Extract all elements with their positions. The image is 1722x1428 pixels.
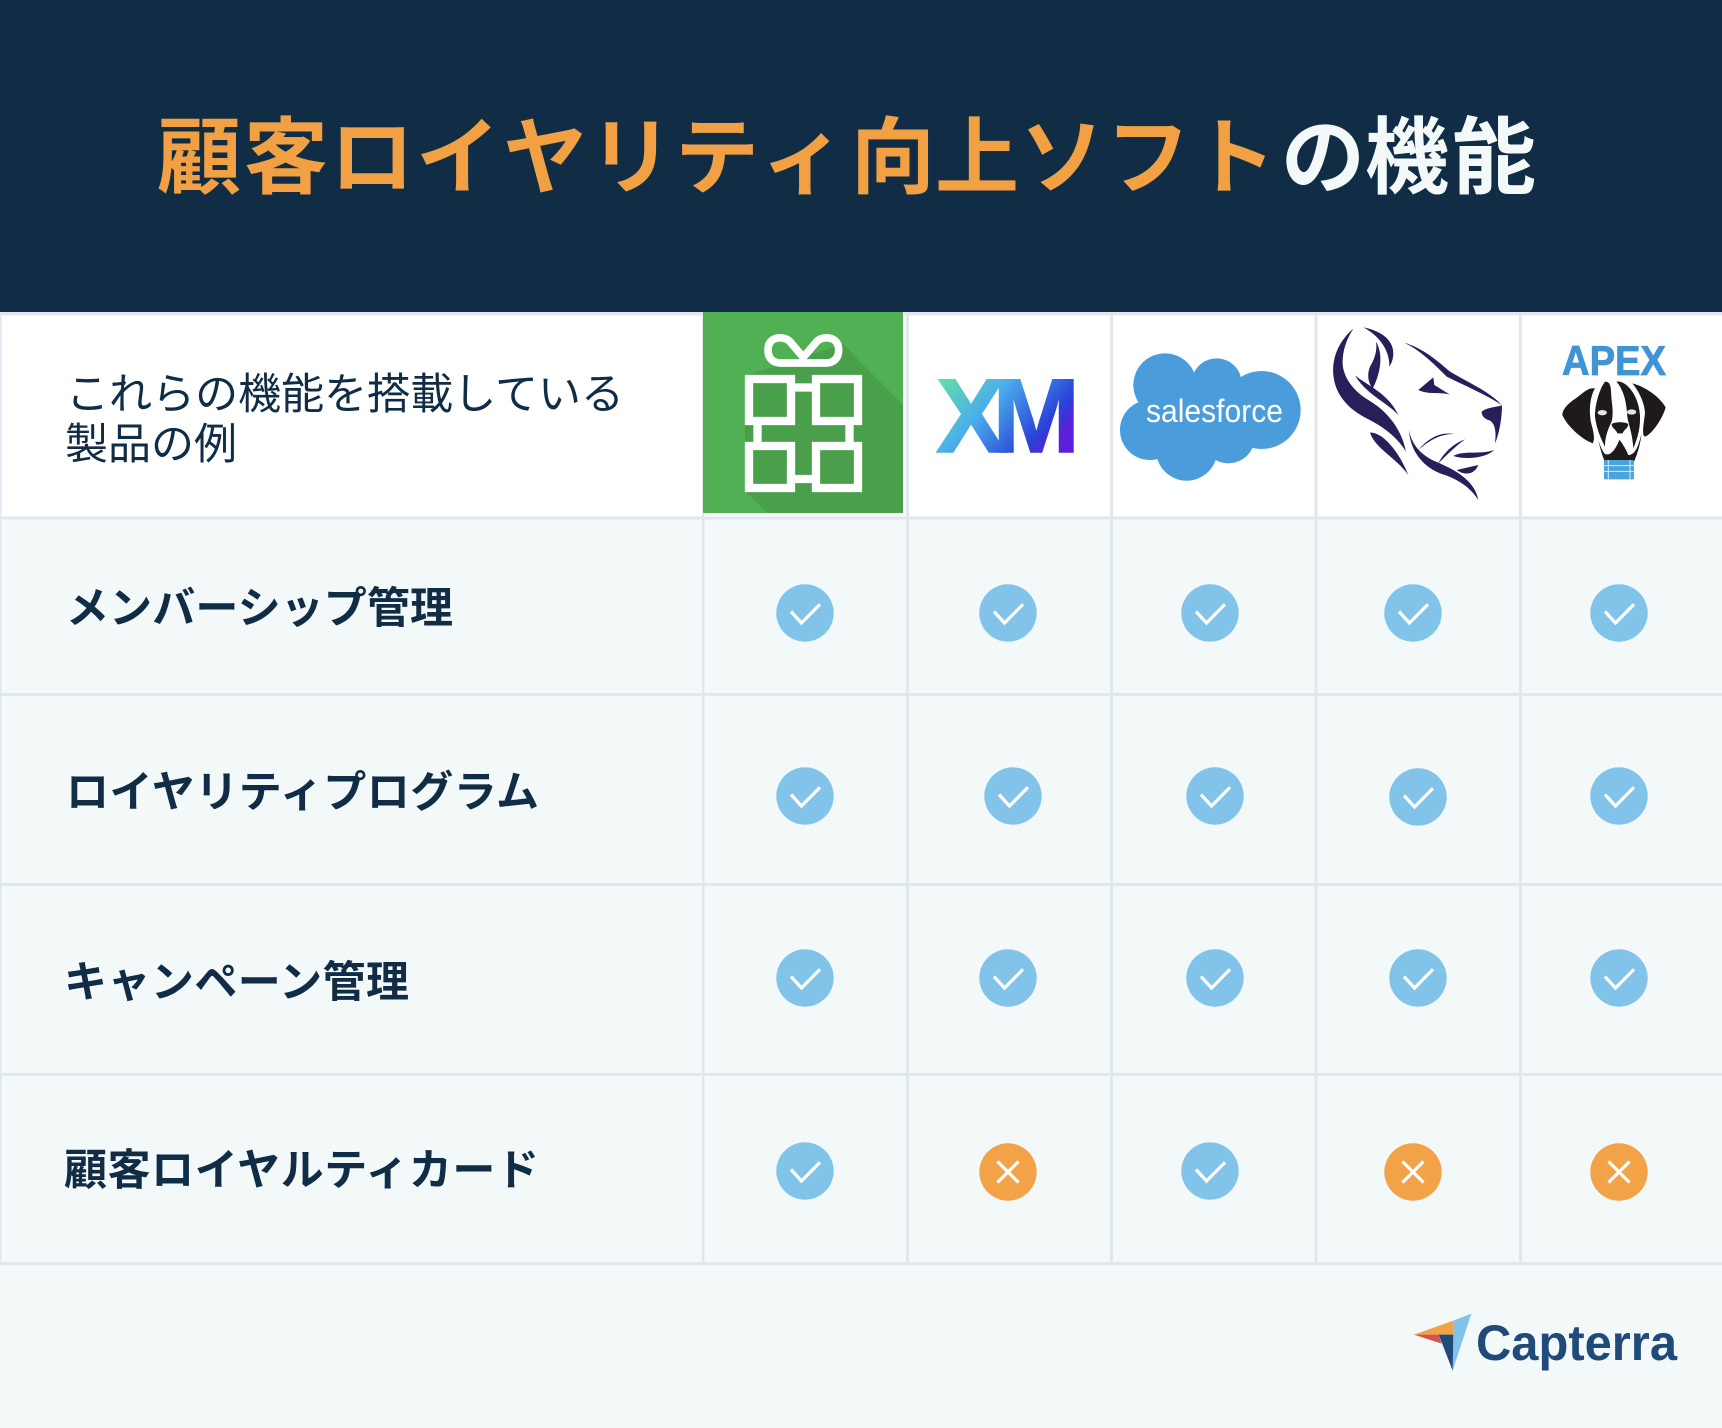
row 1 marks	[776, 584, 1648, 642]
logo: salesforce	[1120, 353, 1301, 481]
row 4 marks	[776, 1142, 1648, 1201]
row 2 marks	[776, 767, 1648, 826]
row label: loyalty program: ロイヤリティプログラム	[66, 769, 539, 817]
header row label	[65, 371, 624, 469]
logo: green gift box	[703, 312, 903, 513]
logo: apex	[1562, 337, 1666, 479]
logo: apex: APEX	[1562, 337, 1666, 384]
capterra logo: Capterra	[1476, 1315, 1678, 1371]
row label: membership: メンバーシップ管理	[66, 585, 453, 633]
logo: XM: XM	[936, 358, 1080, 475]
row 3 marks	[776, 949, 1648, 1007]
header row label: 製品の例	[65, 421, 237, 469]
header band	[0, 0, 1722, 312]
header row label: これらの機能を搭載している	[66, 371, 624, 419]
row label: loyalty card: 顧客ロイヤルティカード	[64, 1147, 539, 1195]
logo: lion	[1333, 327, 1502, 500]
logo: salesforce: salesforce	[1146, 393, 1283, 429]
logo header row background	[0, 312, 1722, 518]
row label: campaign: キャンペーン管理	[64, 959, 409, 1007]
title: 顧客ロイヤリティ向上ソフトの機能	[157, 111, 1536, 205]
